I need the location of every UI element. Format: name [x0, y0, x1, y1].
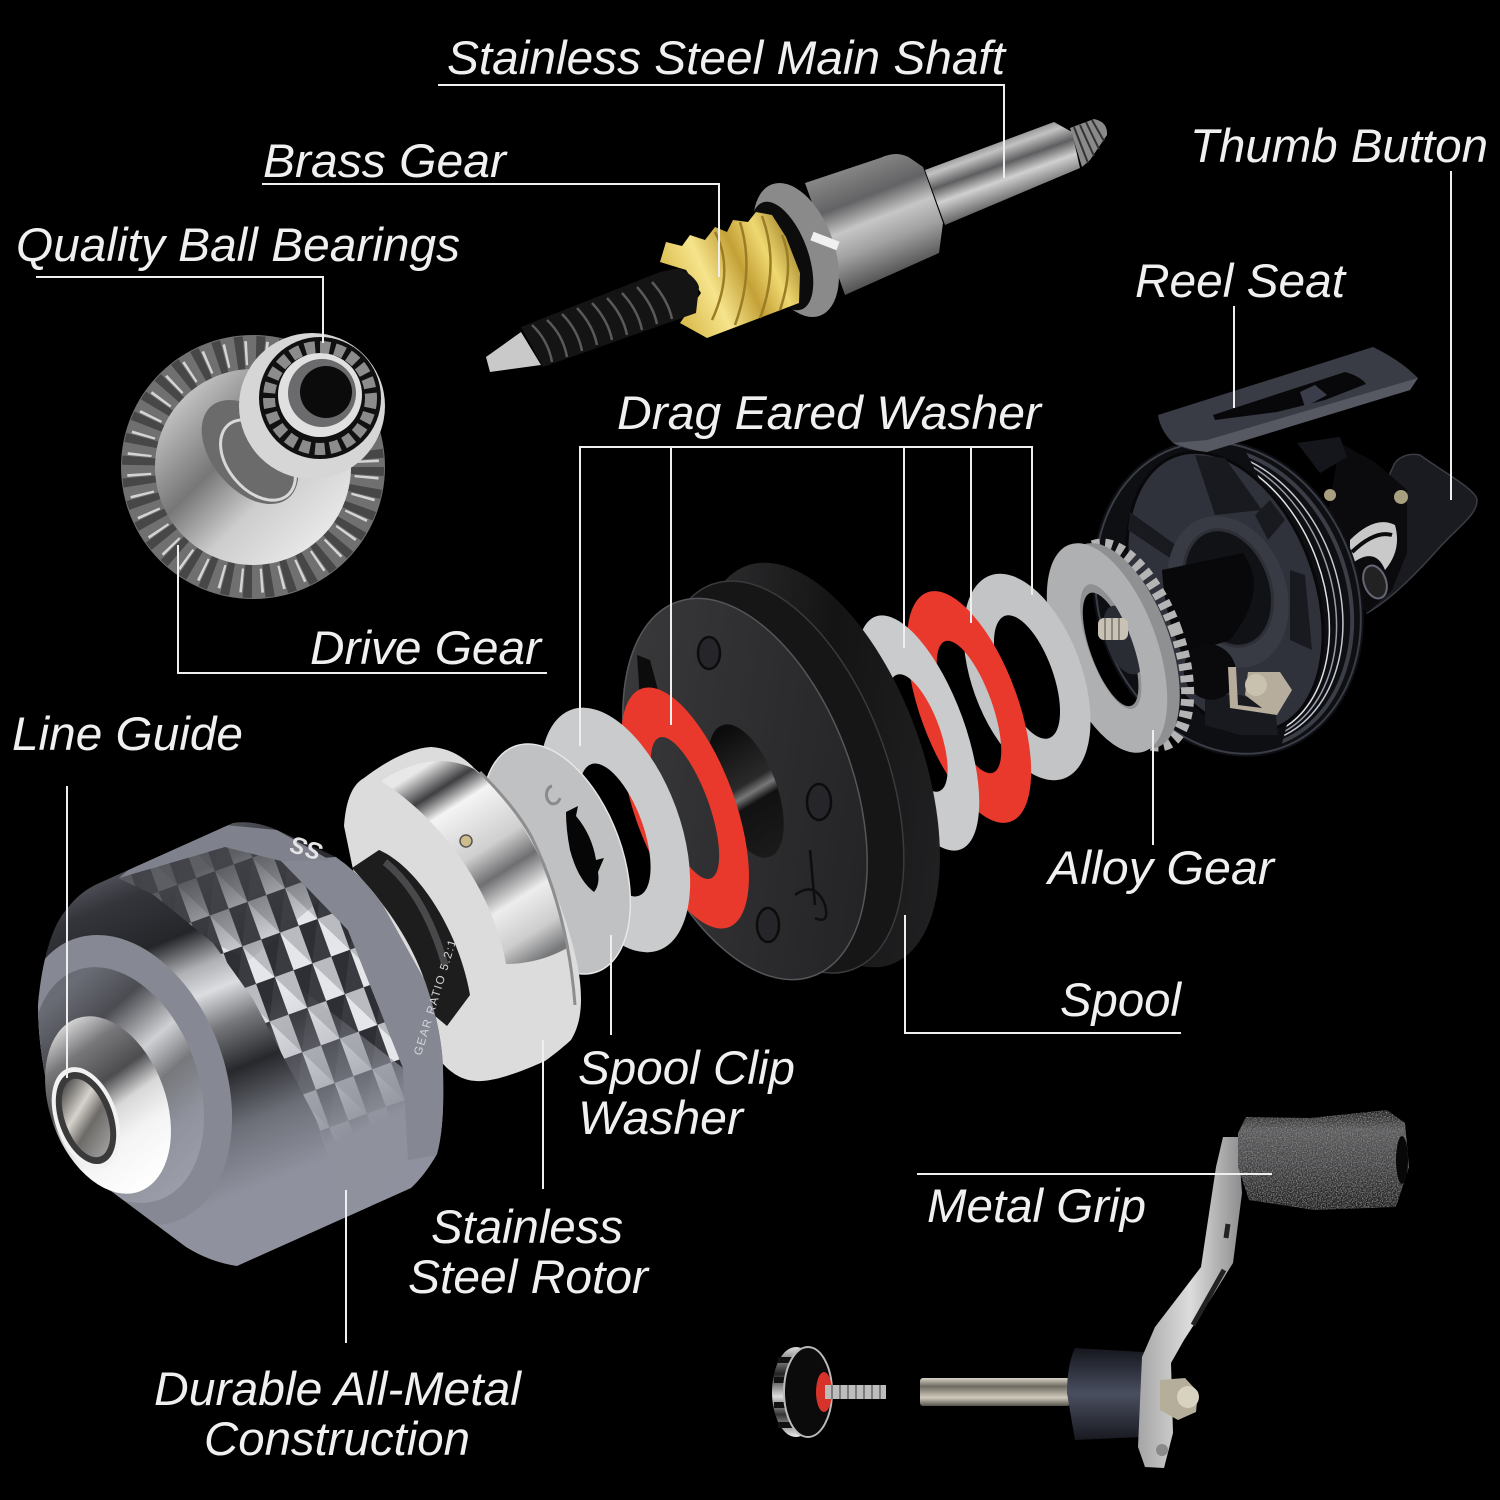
- brass gear: [660, 212, 800, 338]
- label: Alloy Gear: Alloy Gear: [1045, 841, 1276, 894]
- label: Spool Clip Washer: [578, 935, 795, 1144]
- hub: [1067, 1348, 1145, 1440]
- tip: [486, 332, 541, 372]
- label: Durable All-Metal Construction: [154, 1190, 523, 1465]
- nut: [1160, 1378, 1198, 1420]
- stainless steel rotor: [344, 747, 581, 1081]
- red washer 2: [881, 576, 1057, 838]
- bolt disc: [1095, 600, 1153, 680]
- label: Durable All-Metal Construction: Durable All-Metal: [154, 1362, 523, 1415]
- label: Drag Eared Washer: Drag Eared Washer: [617, 386, 1043, 439]
- label: Stainless Steel Main Shaft: [438, 31, 1007, 178]
- reel frame: [1093, 437, 1364, 757]
- label: Stainless Steel Main Shaft: Stainless Steel Main Shaft: [447, 31, 1007, 84]
- black screw: [521, 268, 699, 367]
- rear housing: [1320, 443, 1408, 613]
- label: Spool Clip Washer: Washer: [578, 1091, 745, 1144]
- knob: [772, 1347, 886, 1437]
- shaft: [925, 122, 1080, 225]
- label: Quality Ball Bearings: [16, 218, 460, 343]
- brand logo: SS: [287, 830, 326, 865]
- label: Brass Gear: [262, 134, 719, 277]
- label: Stainless Steel Rotor: Steel Rotor: [408, 1250, 650, 1303]
- label: Spool Clip Washer: Spool Clip: [578, 1041, 795, 1094]
- bearing: [239, 333, 385, 479]
- label: Stainless Steel Rotor: Stainless: [431, 1200, 623, 1253]
- drive gear with ball bearing: [121, 333, 385, 599]
- reel seat: [1158, 347, 1418, 452]
- gear ratio text: GEAR RATIO 5.2:1: [412, 939, 459, 1057]
- threaded end: [1070, 119, 1107, 167]
- label: Thumb Button: Thumb Button: [1190, 119, 1488, 172]
- red washer 1: [595, 672, 775, 944]
- label: Stainless Steel Rotor: [408, 1040, 650, 1303]
- rod: [920, 1378, 1070, 1406]
- label: Durable All-Metal Construction: Construction: [204, 1412, 470, 1465]
- washer 2: [831, 600, 1005, 866]
- label: Reel Seat: Reel Seat: [1135, 254, 1347, 307]
- washer 1: [510, 687, 720, 973]
- label: Drive Gear: Drive Gear: [310, 621, 543, 674]
- label: Drive Gear: [178, 545, 547, 674]
- label: Quality Ball Bearings: Quality Ball Bearings: [16, 218, 460, 271]
- arm: [1138, 1137, 1242, 1468]
- spool rivets: [698, 637, 831, 942]
- label: Drag Eared Washer: [580, 386, 1043, 746]
- label: Brass Gear: Brass Gear: [263, 134, 508, 187]
- washer 3: [938, 557, 1116, 797]
- frame spokes: [1128, 455, 1312, 735]
- label: Metal Grip: Metal Grip: [927, 1179, 1146, 1232]
- line guide cone: [22, 999, 194, 1211]
- gear ring band: [281, 857, 443, 1160]
- label: Spool: Spool: [1060, 973, 1183, 1026]
- diamond cut pattern: [119, 847, 410, 1230]
- rim grooves: [1246, 452, 1354, 744]
- alloy gear: [1022, 527, 1211, 768]
- collar: [805, 154, 943, 295]
- spool: [575, 531, 988, 1013]
- stepped tier: [38, 935, 232, 1225]
- main shaft assembly: [486, 119, 1107, 372]
- label: Line Guide: Line Guide: [12, 707, 243, 760]
- handle assembly: [772, 1110, 1409, 1468]
- bearing: [736, 171, 856, 329]
- durable all-metal body: [38, 822, 456, 1266]
- spool clip washer: [453, 724, 659, 994]
- metal grip: [1238, 1110, 1409, 1210]
- label: Spool: [905, 915, 1183, 1033]
- thumb button: [1350, 454, 1477, 613]
